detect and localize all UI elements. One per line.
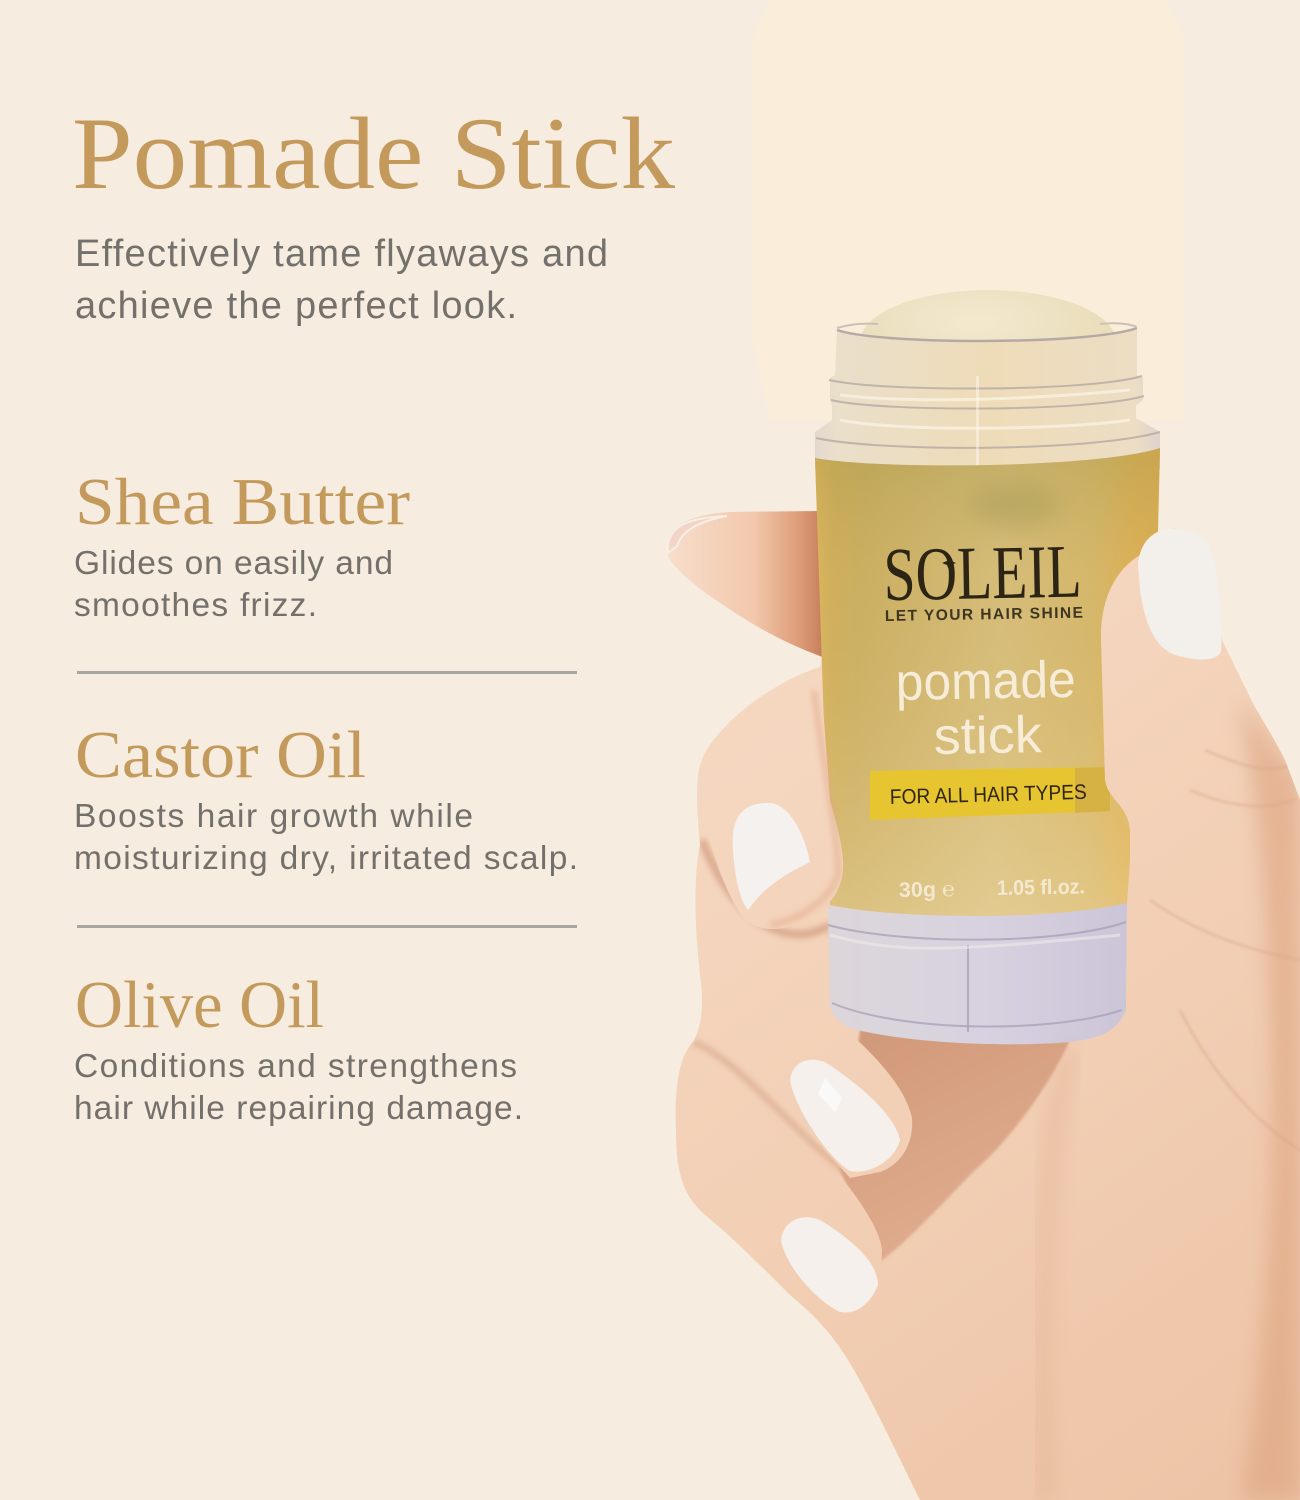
thumb and wrist shading [1044,700,1300,1500]
ingredient: castor oil: Castor Oil [75,718,366,792]
ingredient: shea butter [74,465,410,624]
subtitle [75,233,608,327]
finger creases [693,840,850,1175]
brand name: SOLEIL [883,530,1082,617]
tagline: LET YOUR HAIR SHINE [885,605,1083,625]
ingredient: castor oil: Boosts hair growth while [74,798,473,835]
ingredient: olive oil: Olive Oil [75,968,324,1042]
little fingertip [770,1176,882,1312]
ingredient: shea butter: Shea Butter [75,465,410,539]
ingredient: shea butter: smoothes frizz. [74,587,317,624]
product: gold label: stick [933,706,1043,766]
thumbnail [1138,529,1221,660]
neck with threads [815,328,1160,470]
product: transparent base [828,903,1127,1044]
weight: 30g ℮ [899,878,955,902]
palm hollow shadow [840,1030,1070,1262]
background glow behind product [752,0,1185,420]
ingredient: shea butter: Glides on easily and [74,545,393,582]
little fingernail [781,1217,878,1313]
index finger [668,511,825,658]
product: transparent top [815,290,1160,470]
band text: FOR ALL HAIR TYPES [890,781,1087,809]
hand silhouette [668,511,1300,1500]
logo star [942,556,956,570]
ingredient: castor oil: moisturizing dry, irritated scalp. [74,840,578,877]
index fingernail [668,516,727,553]
product name: pomade [895,651,1076,712]
pomade dome [860,290,1116,394]
middle finger in front of bottle [697,667,843,929]
product: gold label: 1.05 fl.oz. [997,875,1085,900]
subtitle: achieve the perfect look. [75,285,517,327]
ingredient: olive oil: Conditions and strengthens [74,1048,517,1085]
yellow band [870,767,1110,820]
illustration: hand holding product [668,290,1300,1500]
thumb in front of bottle [1040,540,1300,1500]
ingredient: olive oil: hair while repairing damage. [74,1090,523,1127]
nail highlight [818,1078,842,1112]
metallic smudge [970,483,1060,527]
subtitle: Effectively tame flyaways and [75,233,608,275]
ring fingernail [790,1060,900,1172]
ingredient: castor oil [74,718,578,877]
middle fingertip shading [770,690,838,925]
ring fingertip [780,1020,912,1178]
product: gold label [815,448,1160,916]
middle fingernail [733,803,810,910]
title: Pomade Stick [72,97,676,211]
ingredient: olive oil [74,968,523,1127]
